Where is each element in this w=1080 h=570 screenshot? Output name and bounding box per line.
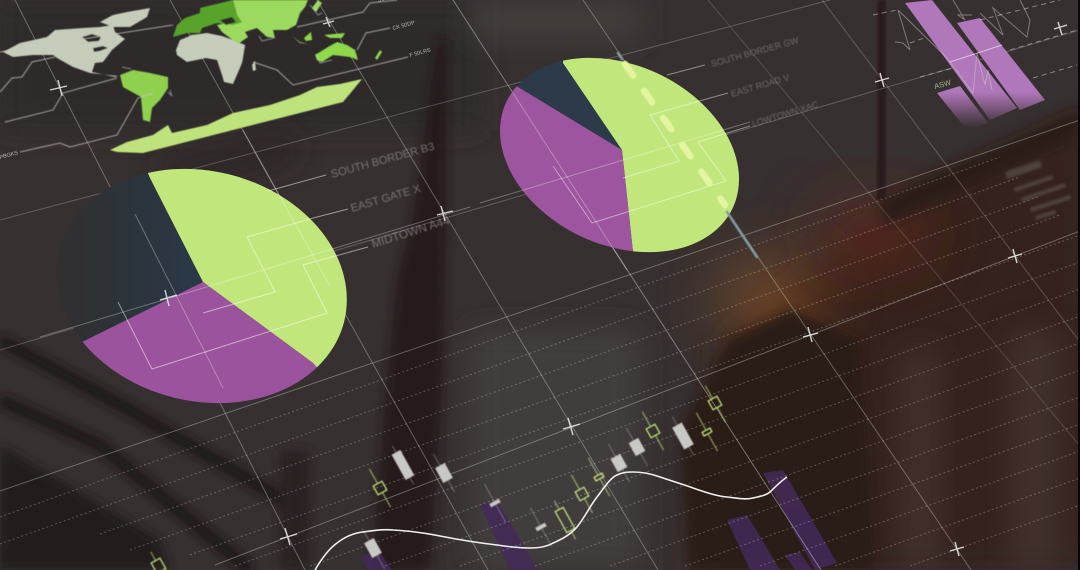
map callout lines bbox=[0, 0, 408, 152]
map: North America bbox=[3, 25, 125, 77]
slice: green bbox=[148, 168, 347, 368]
map: Antarctica bbox=[110, 79, 362, 153]
map: Europe bbox=[173, 0, 242, 37]
map: Australia bbox=[315, 42, 358, 62]
black edge strip bbox=[1078, 0, 1080, 570]
world map bbox=[3, 0, 382, 153]
pie callouts: small bbox=[553, 65, 750, 223]
map: Greenland bbox=[100, 8, 150, 27]
zigzag sparklines: top right bbox=[895, 0, 1030, 93]
green hollow candles bbox=[146, 383, 730, 570]
crane mast bbox=[372, 40, 446, 570]
slice: navy bbox=[518, 60, 622, 150]
slice: green bbox=[563, 58, 739, 252]
dark purple bars behind the line chart bbox=[360, 470, 837, 570]
dashed lines: top right bbox=[873, 0, 1077, 78]
grid lines crossing the pies bbox=[40, 93, 750, 388]
pie labels: large: EAST GATE X bbox=[349, 183, 423, 215]
bar chart: top right bbox=[905, 0, 1045, 130]
line chart: white curve bbox=[315, 472, 787, 570]
candlestick chart bbox=[146, 383, 730, 570]
map: Japan and east coast bbox=[312, 0, 322, 12]
map callout labels: CK 50DP bbox=[392, 20, 416, 32]
map: bracket marks bbox=[122, 5, 332, 96]
map: Africa bbox=[176, 33, 245, 84]
map callout labels bbox=[0, 0, 432, 161]
dashed highlight line across small pie bbox=[618, 53, 757, 257]
map: Hudson Bay bbox=[82, 34, 101, 42]
map: islands bbox=[292, 32, 382, 60]
map: Great Lakes bbox=[93, 46, 108, 52]
map: Madagascar bbox=[252, 61, 256, 71]
pie labels: large: MIDTOWN A44 bbox=[370, 213, 452, 251]
pie labels: small: SOUTH BORDER GW bbox=[710, 35, 800, 69]
pie chart: small bbox=[500, 58, 739, 252]
bar 2 bbox=[957, 18, 1045, 110]
slice: purple bbox=[500, 86, 633, 252]
dotted grid lines bbox=[0, 157, 1080, 566]
map: South America bbox=[120, 70, 168, 122]
slice: purple bbox=[82, 282, 317, 404]
bar label: ASW bbox=[933, 78, 953, 91]
pie labels: small: EAST ROAD V bbox=[730, 72, 790, 99]
steel beams bbox=[0, 340, 300, 510]
pie labels: small bbox=[710, 35, 820, 129]
pie callouts: large bbox=[118, 175, 368, 369]
map callout labels: F 50LRS bbox=[409, 47, 432, 59]
pie labels: large bbox=[330, 141, 452, 251]
map: Asia bbox=[217, 0, 308, 44]
slice: navy bbox=[73, 173, 203, 336]
bar 3 bbox=[937, 86, 988, 130]
white candles bbox=[358, 414, 698, 570]
pie chart: large bbox=[73, 168, 347, 404]
pie labels: large: SOUTH BORDER B3 bbox=[330, 141, 436, 181]
pie labels: small: LOWTOWN XAC bbox=[751, 99, 820, 129]
map: Black Sea bbox=[220, 17, 236, 25]
bar 1 bbox=[905, 0, 1017, 120]
bar highlight line bbox=[950, 45, 1002, 62]
blurred text block: right bbox=[1005, 160, 1071, 220]
